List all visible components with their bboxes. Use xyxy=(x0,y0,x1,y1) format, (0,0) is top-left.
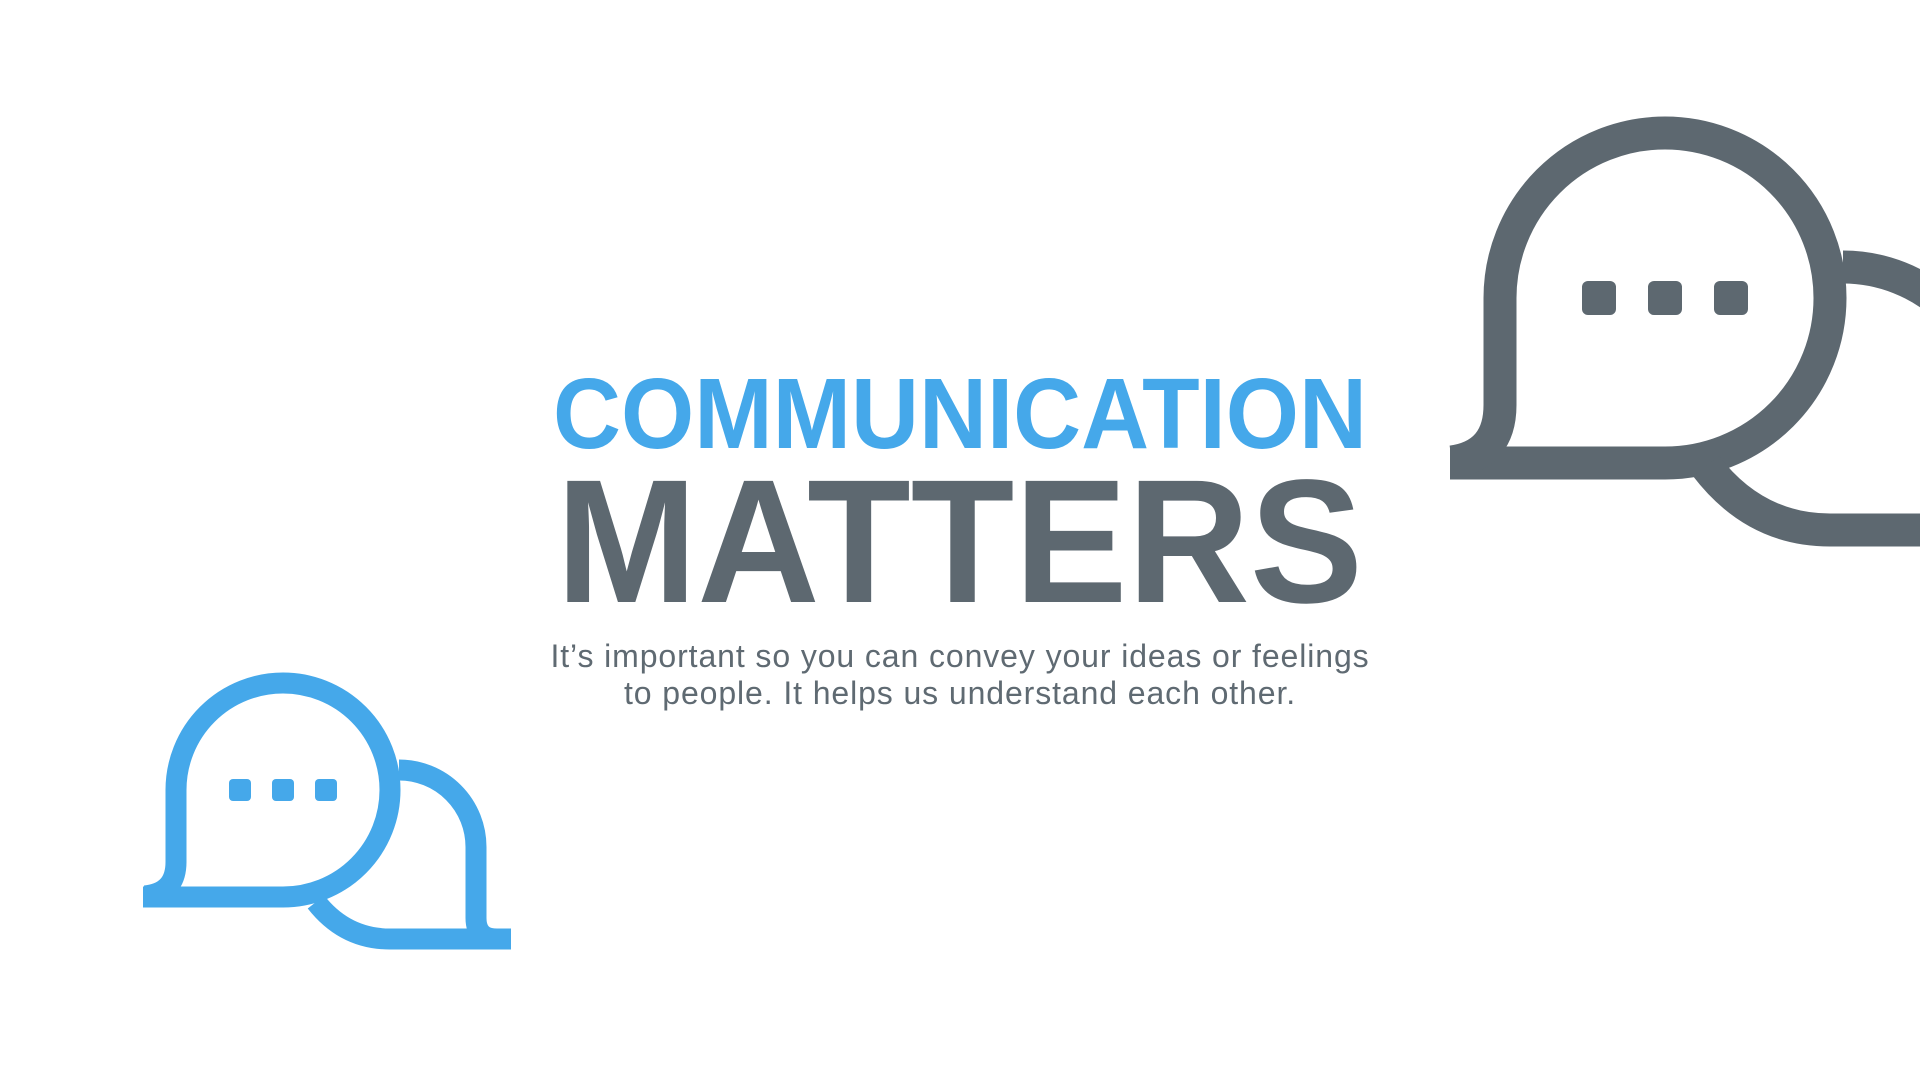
subtitle text xyxy=(550,638,1370,711)
subtitle text: to people. It helps us understand each other. xyxy=(624,675,1296,711)
icon: blue chat bubbles xyxy=(143,672,511,950)
title xyxy=(553,370,1367,610)
subtitle text: It’s important so you can convey your ideas or feelings xyxy=(550,638,1370,674)
